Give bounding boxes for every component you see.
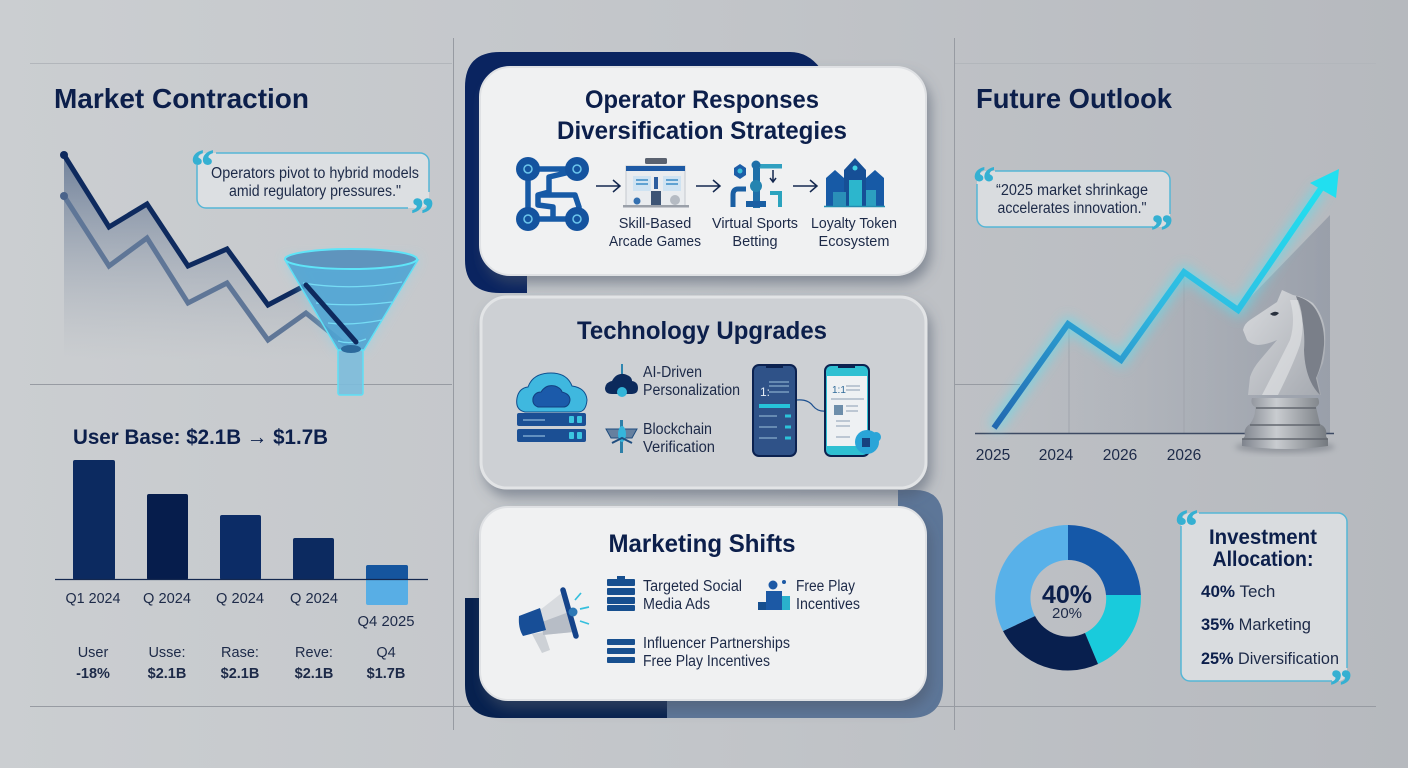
line chart: market decline <box>60 151 354 360</box>
labels: strategies <box>609 216 897 250</box>
callout: operators quote: “ <box>191 140 214 191</box>
stats row: quarterly values: Rase: <box>221 645 259 661</box>
axis labels: years: 2025 <box>976 447 1010 464</box>
icon: phone dark <box>753 365 796 456</box>
labels: strategies: Arcade Games <box>609 234 701 250</box>
icon: arcade screen <box>623 158 689 208</box>
callout: future quote: accelerates innovation." <box>998 200 1146 217</box>
icon: phone light <box>825 365 881 456</box>
arrow 2 <box>696 180 720 192</box>
callout: operators quote <box>191 140 434 239</box>
donut chart: investment allocation: 20% <box>1052 605 1082 622</box>
callout: operators quote: amid regulatory pressures." <box>229 183 401 200</box>
arrow 1 <box>596 180 620 192</box>
stats row: quarterly values: User <box>78 645 108 661</box>
panel: investment allocation: Allocation: <box>1212 548 1314 571</box>
stats row: quarterly values: $2.1B <box>295 666 333 682</box>
text: targeted social media ads: Media Ads <box>643 596 710 613</box>
labels: strategies: Ecosystem <box>819 234 889 250</box>
text: AI personalization <box>643 364 740 399</box>
stats row: quarterly values: Usse: <box>148 645 186 661</box>
stats row: quarterly values: Q4 <box>376 645 396 661</box>
icon: phone light: 1:1 <box>832 385 846 396</box>
text: blockchain verification: Verification <box>643 439 715 456</box>
stats row: quarterly values: -18% <box>76 666 110 682</box>
backing frame: bottom bracket <box>465 490 943 718</box>
backing frame: navy top bracket <box>465 52 820 293</box>
stats row: quarterly values: $1.7B <box>367 666 405 682</box>
icon: token ecosystem buildings <box>824 158 885 206</box>
bar chart: user base by quarter: Q 2024 <box>143 591 191 607</box>
stats row: quarterly values <box>76 645 405 682</box>
labels: strategies: Virtual Sports <box>712 216 798 232</box>
text: free play incentives: Incentives <box>796 596 860 613</box>
heading: Market Contraction: Market Contraction <box>54 83 309 114</box>
icon: phone dark: 1: <box>760 385 770 399</box>
text: targeted social media ads: Targeted Social <box>643 578 742 595</box>
icon: AI cloud <box>605 364 638 397</box>
heading: User Base: User Base: $2.1B → $1.7B <box>73 425 328 449</box>
arrow 3 <box>793 180 817 192</box>
axis labels: years: 2024 <box>1039 447 1074 464</box>
callout: future quote: ” <box>1151 206 1173 255</box>
panel: marketing shifts <box>480 507 926 700</box>
icon: free play podium <box>758 580 790 610</box>
text: targeted social media ads <box>643 578 742 613</box>
callout: operators quote: Operators pivot to hybrid models <box>211 165 419 182</box>
callout: future quote: “2025 market shrinkage <box>996 182 1148 199</box>
axis labels: years: 2026 <box>1167 447 1201 464</box>
heading: diversification strategies: Diversification Strategies <box>557 117 847 145</box>
stats row: quarterly values: $2.1B <box>221 666 259 682</box>
axis labels: years <box>976 447 1201 464</box>
stats row: quarterly values: $2.1B <box>148 666 186 682</box>
icon: blockchain badge <box>606 420 637 453</box>
callout: future quote <box>973 158 1173 255</box>
panel: investment allocation: Investment <box>1209 526 1317 549</box>
connector <box>797 400 836 411</box>
text: influencer partnerships: Influencer Partnerships <box>643 635 790 652</box>
icon: server stack <box>607 576 635 611</box>
text: blockchain verification: Blockchain <box>643 421 712 438</box>
text: blockchain verification <box>643 421 715 456</box>
icon: megaphone <box>519 590 589 653</box>
icon: cloud server <box>517 373 587 442</box>
panel: investment allocation: 35% Marketing <box>1201 615 1311 634</box>
labels: strategies: Betting <box>732 234 778 250</box>
text: free play incentives <box>796 578 860 613</box>
labels: strategies: Skill-Based <box>619 216 691 232</box>
panel: operator responses <box>480 67 926 275</box>
stats row: quarterly values: Reve: <box>295 645 333 661</box>
text: influencer partnerships: Free Play Incentives <box>643 653 770 670</box>
donut chart: investment allocation <box>995 525 1141 671</box>
donut chart: investment allocation: 40% <box>1042 581 1092 609</box>
text: free play incentives: Free Play <box>796 578 855 595</box>
icon: chess knight <box>1235 290 1335 453</box>
bar chart: user base by quarter: Q1 2024 <box>66 591 120 607</box>
bar chart: user base by quarter <box>55 460 428 630</box>
panel: investment allocation: ” <box>1330 661 1352 710</box>
panel: investment allocation: 25% Diversification <box>1201 649 1339 668</box>
bar chart: user base by quarter: Q 2024 <box>290 591 338 607</box>
icon: virtual sports machinery <box>733 160 782 208</box>
labels: strategies: Loyalty Token <box>811 216 897 232</box>
callout: operators quote: ” <box>411 188 434 239</box>
heading: technology upgrades: Technology Upgrades <box>577 317 827 345</box>
text: AI personalization: Personalization <box>643 382 740 399</box>
callout: future quote: “ <box>973 158 995 207</box>
bar chart: user base by quarter: Q4 2025 <box>358 614 414 630</box>
line chart: future outlook growth <box>975 169 1339 434</box>
text: influencer partnerships <box>643 635 790 670</box>
icon: network path <box>516 157 589 231</box>
bar chart: user base by quarter: Q 2024 <box>216 591 264 607</box>
panel: investment allocation: 40% Tech <box>1201 582 1275 601</box>
panel: investment allocation: “ <box>1175 500 1198 551</box>
axis labels: years: 2026 <box>1103 447 1137 464</box>
heading: marketing shifts: Marketing Shifts <box>608 530 796 558</box>
heading: operator responses: Operator Responses <box>585 86 819 114</box>
heading: Future Outlook: Future Outlook <box>976 83 1172 114</box>
panel: investment allocation <box>1175 500 1352 710</box>
panel: technology upgrades <box>481 297 926 488</box>
icon: funnel <box>285 249 418 395</box>
icon: server stack small <box>607 639 635 663</box>
text: AI personalization: AI-Driven <box>643 364 702 381</box>
